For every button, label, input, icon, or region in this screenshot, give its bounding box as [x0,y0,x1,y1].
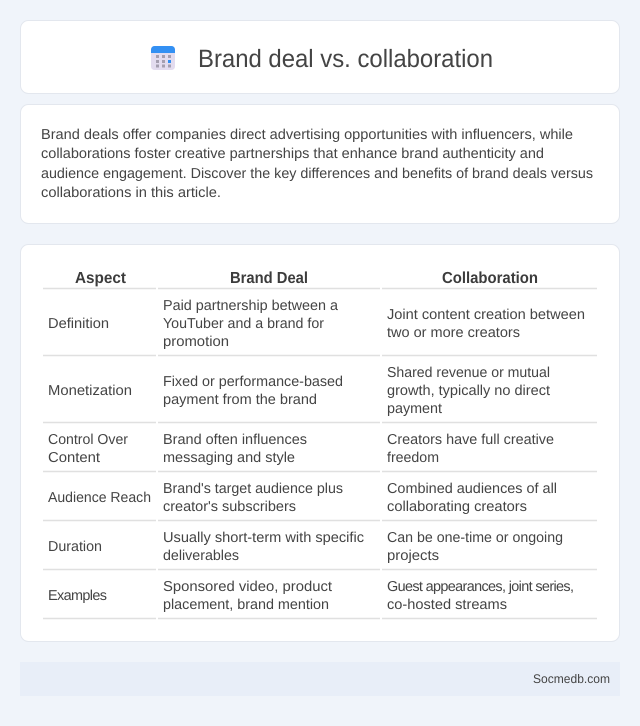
row: audience reach: Brand's target audience plus [163,481,343,497]
icon: calendar [151,46,175,70]
row: control over content: Brand often influences [163,432,307,448]
row: definition: two or more creators [387,325,520,341]
row: examples: co-hosted streams [387,597,507,613]
text block: introduction: audience engagement. Discover the key differences and benefits of brand deals versus [41,166,593,182]
footer text: Socmedb.com [533,672,610,686]
table header: Brand Deal [230,270,308,287]
row: monetization: Monetization [48,383,132,399]
row: definition: promotion [163,334,229,350]
row: control over content [48,432,554,466]
title: Brand deal vs. collaboration [198,45,493,73]
row: definition: Joint content creation between [387,307,585,323]
row: monetization: growth, typically no direct [387,383,550,399]
row: definition: Definition [48,316,109,332]
row: control over content: freedom [387,450,439,466]
row: monetization [48,365,550,417]
row: monetization: Fixed or performance-based [163,374,343,390]
row: monetization: payment from the brand [163,392,317,408]
row: control over content: Creators have full creative [387,432,554,448]
row: duration [48,530,563,564]
row: control over content: messaging and style [163,450,295,466]
row: audience reach: Combined audiences of all [387,481,557,497]
row: duration: Duration [48,539,102,555]
row: duration: Can be one-time or ongoing [387,530,563,546]
row: examples: Sponsored video, product [163,579,332,595]
text block: introduction: collaborations in this article. [41,185,221,201]
row: duration: projects [387,548,439,564]
row: examples: placement, brand mention [163,597,329,613]
row: duration: Usually short-term with specific [163,530,364,546]
text block: introduction [41,127,593,201]
text block: introduction: collaborations foster creative partnerships that enhance brand authenticity and [41,146,544,162]
row: audience reach: creator's subscribers [163,499,296,515]
row: audience reach: Audience Reach [48,490,151,506]
text block: introduction: Brand deals offer companies direct advertising opportunities with influencers, while [41,127,573,143]
row: monetization: payment [387,401,442,417]
row: examples [48,579,574,613]
row: examples: Guest appearances, joint series, [387,579,574,595]
footer bar [20,662,620,696]
table header: Collaboration [442,270,538,287]
panel: comparison table [20,244,620,642]
row: definition [48,298,585,350]
row: control over content: Content [48,450,100,466]
row: definition: Paid partnership between a [163,298,338,314]
table header [75,270,538,287]
table header: Aspect [75,270,127,287]
row: duration: deliverables [163,548,239,564]
row: control over content: Control Over [48,432,128,448]
row: audience reach [48,481,557,515]
row: monetization: Shared revenue or mutual [387,365,550,381]
panel: title card [20,20,620,94]
row: audience reach: collaborating creators [387,499,527,515]
row: examples: Examples [48,588,107,604]
panel: introduction [20,104,620,224]
row: definition: YouTuber and a brand for [163,316,324,332]
